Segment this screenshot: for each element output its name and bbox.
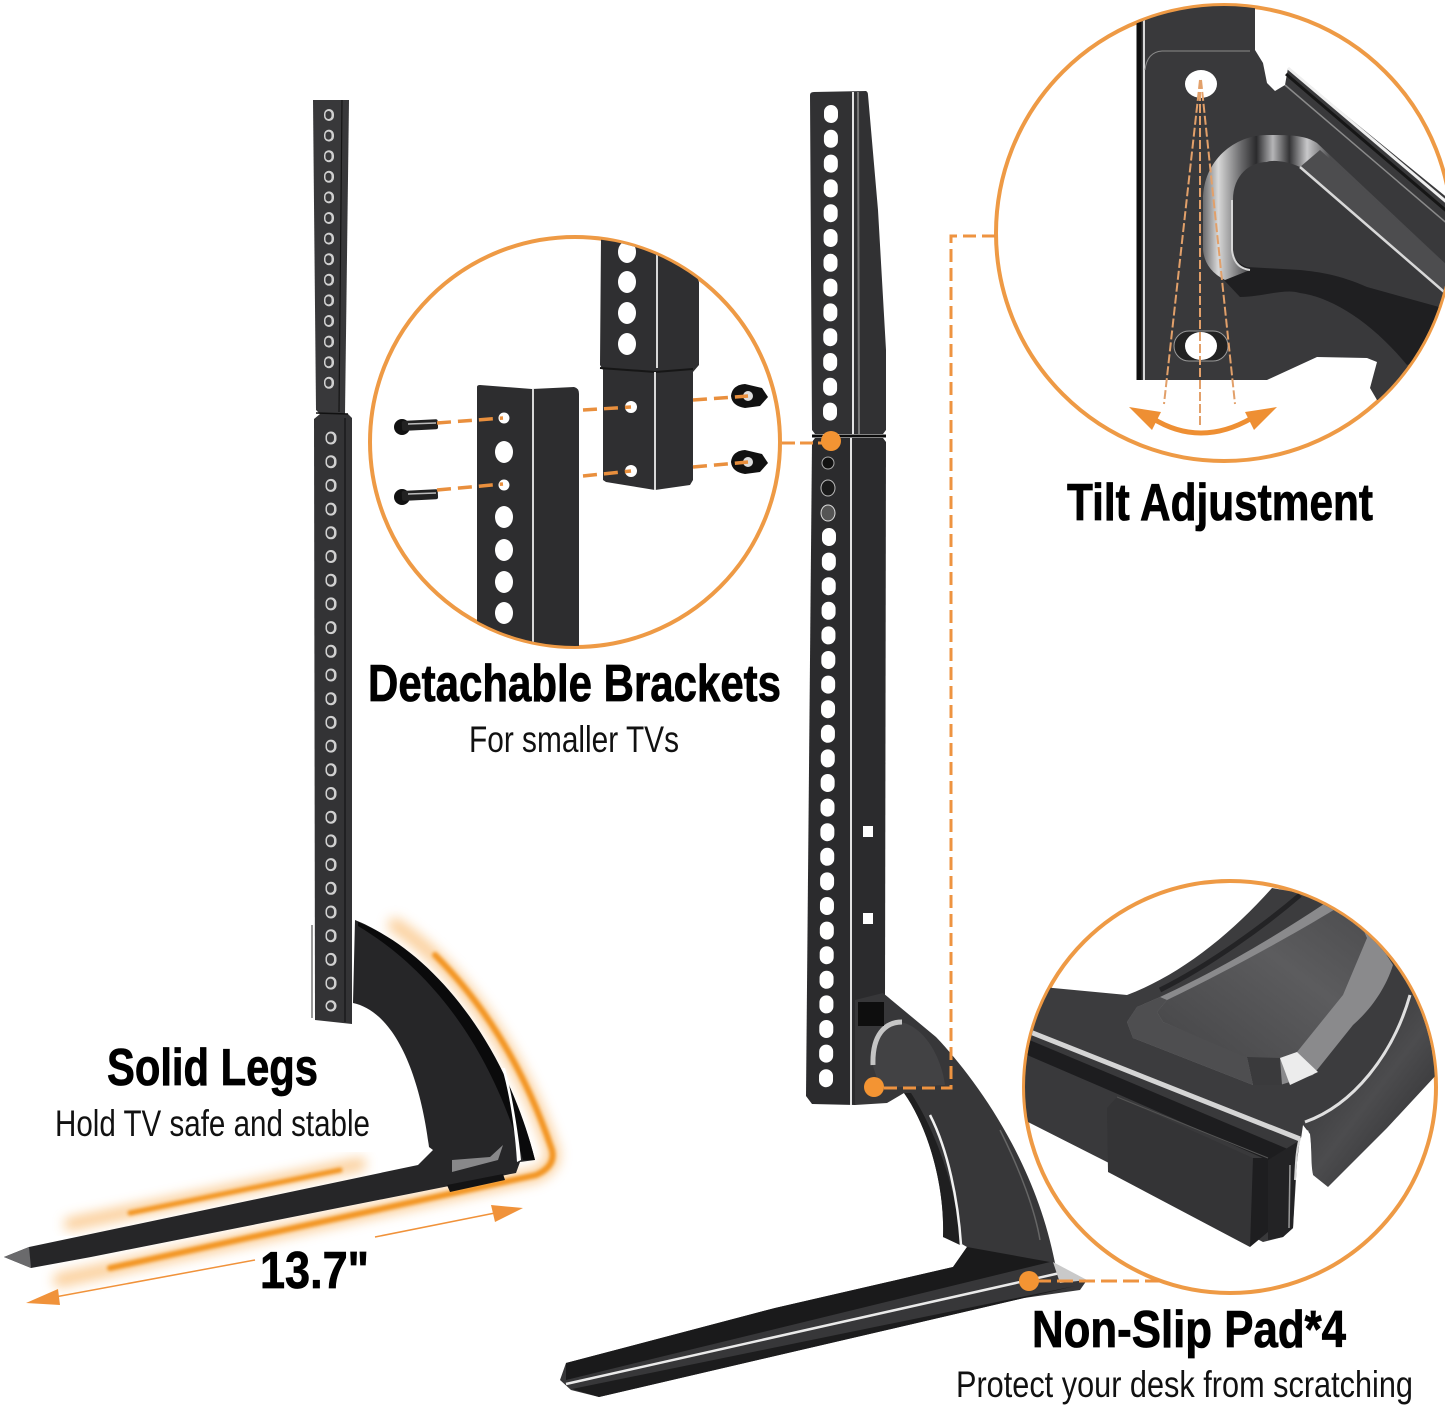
rubber pad: [1107, 1097, 1268, 1247]
panel: detachable brackets detail: [370, 237, 780, 650]
right stand: post: [806, 91, 886, 1105]
outer rim: [1308, 996, 1435, 1187]
dimension arrows: 13.7 inch: [26, 1205, 523, 1305]
tilt dashed lines: [1164, 80, 1235, 428]
tilt bracket plate: [1137, 0, 1445, 400]
caption: Hold TV safe and stable: Hold TV safe and stable: [55, 1103, 370, 1144]
arm front face: [1020, 1025, 1300, 1242]
heading: Tilt Adjustment: Tilt Adjustment: [1067, 474, 1373, 532]
left stand: orange glow highlight: [60, 925, 553, 1280]
callout lines: bracket connector: [782, 431, 841, 451]
arm groove: [1160, 895, 1300, 990]
embossed panel: [1127, 890, 1393, 1085]
lower bracket: [477, 238, 699, 650]
base arm: [1020, 888, 1445, 1142]
dashed assembly lines: [437, 396, 748, 490]
callout lines: pad connector: [1019, 1271, 1160, 1291]
left stand: post: [312, 100, 352, 1024]
callout lines: tilt connector: [864, 236, 995, 1097]
tilt arrow: [1129, 407, 1277, 433]
nuts: [731, 384, 768, 474]
screws: [394, 419, 438, 505]
left stand: curved leg and base: [4, 920, 535, 1268]
caption: For smaller TVs: For smaller TVs: [469, 719, 679, 760]
embossed recess: [1223, 259, 1438, 365]
panel: non-slip pad detail: [1020, 881, 1445, 1293]
heading: Detachable Brackets: Detachable Brackets: [368, 655, 781, 713]
notch between rail and rim: [1301, 1125, 1313, 1175]
plate slots: [1185, 70, 1217, 98]
dimension label: 13.7": [260, 1242, 369, 1300]
heading: Non-Slip Pad*4: Non-Slip Pad*4: [1032, 1301, 1346, 1359]
heading: Solid Legs: Solid Legs: [107, 1039, 318, 1097]
panel: tilt adjustment detail: [996, 0, 1445, 461]
right stand: curved leg and base: [560, 993, 1087, 1397]
